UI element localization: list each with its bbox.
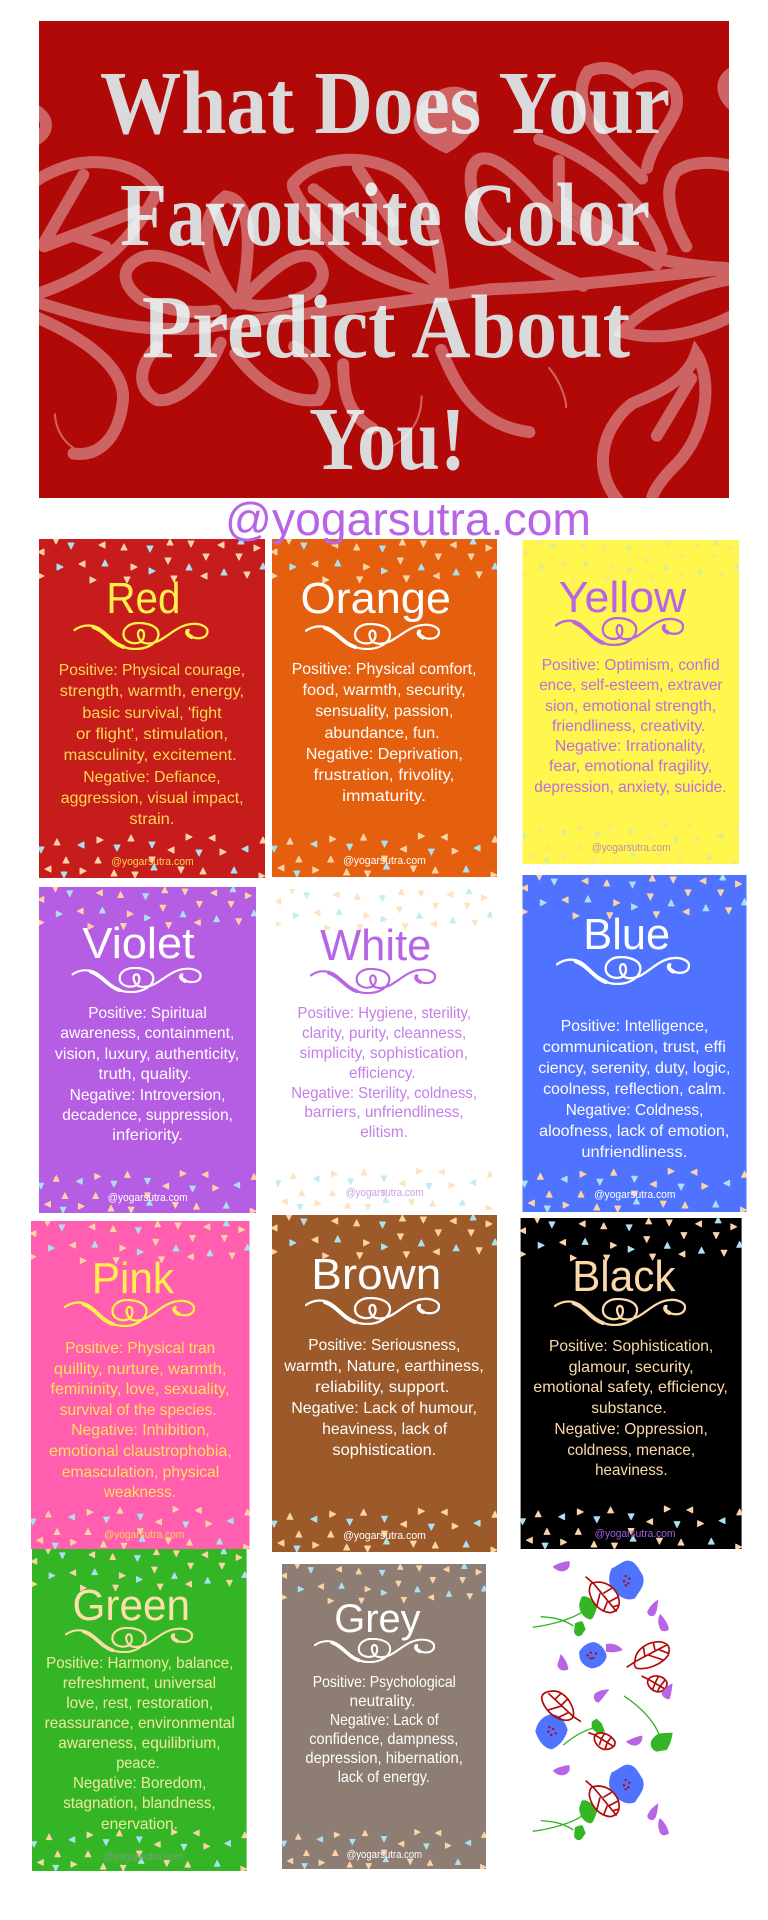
blue card text: coolness, reflection, calm. <box>543 1081 726 1098</box>
green card text: awareness, equilibrium, <box>58 1735 221 1752</box>
grey card text <box>305 1674 463 1786</box>
red card text: aggression, visual impact, <box>61 790 244 807</box>
black card text <box>533 1338 728 1479</box>
orange card text: abundance, fun. <box>324 725 440 742</box>
orange card text: food, warmth, security, <box>302 682 466 699</box>
orange card text: Positive: Physical comfort, <box>292 661 476 678</box>
blue card flourish <box>557 957 689 984</box>
green card text: Negative: Boredom, <box>73 1775 206 1792</box>
blue card text: aloofness, lack of emotion, <box>539 1123 729 1140</box>
blue card heading: Blue <box>583 910 670 959</box>
title <box>100 54 670 489</box>
violet card text: truth, quality. <box>98 1066 192 1083</box>
brown card text: Negative: Lack of humour, <box>291 1400 477 1417</box>
green card text: Positive: Harmony, balance, <box>46 1655 233 1672</box>
yellow card text: fear, emotional fragility, <box>549 758 712 775</box>
green card text: enervation. <box>101 1816 178 1833</box>
orange card watermark: @yogarsutra.com <box>343 855 426 867</box>
brown card heading: Brown <box>311 1250 441 1299</box>
brown card text: warmth, Nature, earthiness, <box>283 1358 484 1375</box>
blue card <box>522 874 747 1213</box>
grey card text: lack of energy. <box>338 1769 430 1786</box>
black card text: heaviness. <box>595 1462 668 1479</box>
green card text: love, rest, restoration, <box>66 1695 213 1712</box>
grey card text: Positive: Psychological <box>313 1674 456 1691</box>
title: Predict About <box>142 278 630 377</box>
green card watermark: @yogarsutra.com <box>104 1851 183 1863</box>
orange card flourish <box>306 624 439 649</box>
white card text: elitism. <box>360 1124 408 1141</box>
red card text: strain. <box>129 811 174 828</box>
green card text: peace. <box>116 1755 160 1772</box>
title: Favourite Color <box>120 166 650 265</box>
brown card text <box>283 1337 484 1459</box>
red card flourish <box>74 623 208 649</box>
black card text: glamour, security, <box>569 1359 694 1376</box>
green card heading: Green <box>72 1581 190 1630</box>
white card text: Negative: Sterility, coldness, <box>291 1085 477 1102</box>
blue card text: ciency, serenity, duty, logic, <box>538 1060 730 1077</box>
grey card text: Negative: Lack of <box>330 1712 439 1729</box>
grey card text: neutrality. <box>350 1693 415 1710</box>
violet card text: Negative: Introversion, <box>70 1087 225 1104</box>
grey card text: confidence, dampness, <box>309 1731 458 1748</box>
brown card text: sophistication. <box>332 1442 436 1459</box>
pink card watermark: @yogarsutra.com <box>104 1529 184 1541</box>
green card <box>31 1548 248 1872</box>
red card <box>38 538 266 879</box>
violet card text: Positive: Spiritual <box>88 1005 207 1022</box>
grey card watermark: @yogarsutra.com <box>347 1849 422 1861</box>
violet card text: decadence, suppression, <box>62 1107 233 1124</box>
violet card text: inferiority. <box>112 1127 183 1144</box>
red card text: masculinity, excitement. <box>64 747 237 764</box>
black card text: coldness, menace, <box>567 1442 695 1459</box>
white card text <box>291 1005 477 1141</box>
brown card watermark: @yogarsutra.com <box>343 1530 426 1542</box>
red card watermark: @yogarsutra.com <box>111 856 194 868</box>
brown card text: Positive: Seriousness, <box>308 1337 460 1354</box>
orange card text: sensuality, passion, <box>315 703 453 720</box>
blue card text <box>538 1018 730 1161</box>
yellow card text: depression, anxiety, suicide. <box>534 779 726 796</box>
green card text: reassurance, environmental <box>45 1715 235 1732</box>
red card text: strength, warmth, energy, <box>60 683 244 700</box>
green card text <box>45 1655 235 1833</box>
black card flourish <box>555 1299 685 1325</box>
green card text: refreshment, universal <box>63 1675 216 1692</box>
white card watermark: @yogarsutra.com <box>346 1187 424 1199</box>
black card <box>520 1217 743 1550</box>
brown card text: reliability, support. <box>315 1379 450 1396</box>
black card text: substance. <box>591 1400 667 1417</box>
pink card text: weakness. <box>103 1484 176 1501</box>
orange card heading: Orange <box>300 574 451 623</box>
black card heading: Black <box>572 1252 676 1301</box>
violet card text: awareness, containment, <box>60 1025 234 1042</box>
white card text: simplicity, sophistication, <box>300 1045 468 1062</box>
white card <box>272 887 497 1213</box>
yellow card text: Negative: Irrationality, <box>555 738 706 755</box>
pink card text: Negative: Inhibition, <box>71 1422 210 1439</box>
violet card flourish <box>72 968 201 992</box>
red card text <box>59 662 245 828</box>
red card text: or flight', stimulation, <box>76 726 228 743</box>
yellow card flourish <box>556 618 683 645</box>
orange card text: Negative: Deprivation, <box>306 746 463 763</box>
pink card text: emasculation, physical <box>62 1464 219 1481</box>
brown card <box>271 1214 498 1553</box>
yellow card <box>522 539 740 865</box>
title: You! <box>309 390 466 489</box>
green card flourish <box>66 1628 192 1652</box>
grey card heading: Grey <box>334 1597 421 1641</box>
white card text: barriers, unfriendliness, <box>304 1104 464 1121</box>
blue card text: unfriendliness. <box>581 1144 687 1161</box>
yellow card text: ence, self-esteem, extraver <box>539 677 723 694</box>
violet card text: vision, luxury, authenticity, <box>55 1046 239 1063</box>
red card text: Positive: Physical courage, <box>59 662 245 679</box>
website address: @yogarsutra.com <box>225 493 591 545</box>
black card text: emotional safety, efficiency, <box>533 1379 728 1396</box>
pink card text <box>49 1340 232 1501</box>
violet card heading: Violet <box>82 919 195 968</box>
blue card text: Positive: Intelligence, <box>561 1018 708 1035</box>
orange card text: immaturity. <box>342 788 426 805</box>
yellow card heading: Yellow <box>559 573 687 622</box>
pink card text: femininity, love, sexuality, <box>50 1381 229 1398</box>
title: What Does Your <box>100 54 670 153</box>
floral brush pattern <box>29 68 735 500</box>
pink card text: Positive: Physical tran <box>65 1340 215 1357</box>
yellow card text: sion, emotional strength, <box>545 698 716 715</box>
blue card watermark: @yogarsutra.com <box>594 1189 676 1201</box>
black card text: Positive: Sophistication, <box>549 1338 713 1355</box>
white card heading: White <box>320 921 431 970</box>
yellow card text: friendliness, creativity. <box>552 718 705 735</box>
violet card text <box>55 1005 239 1144</box>
white card text: clarity, purity, cleanness, <box>302 1025 466 1042</box>
black card text: Negative: Oppression, <box>554 1421 708 1438</box>
red card text: Negative: Defiance, <box>83 769 221 786</box>
violet card watermark: @yogarsutra.com <box>108 1192 188 1204</box>
flower and leaf illustration <box>533 1561 673 1840</box>
orange card text: frustration, frivolity, <box>314 767 454 784</box>
grey card flourish <box>315 1639 434 1662</box>
pink card text: quillity, nurture, warmth, <box>54 1361 226 1378</box>
grey card text: depression, hibernation, <box>305 1750 463 1767</box>
blue card text: communication, trust, effi <box>543 1039 726 1056</box>
pink card <box>30 1220 250 1550</box>
black card watermark: @yogarsutra.com <box>595 1528 676 1540</box>
red card text: basic survival, 'fight <box>82 705 222 722</box>
white card flourish <box>311 969 435 993</box>
orange card <box>271 538 498 878</box>
yellow card watermark: @yogarsutra.com <box>592 842 671 854</box>
brown card flourish <box>306 1298 439 1324</box>
violet card <box>38 886 257 1214</box>
hero banner <box>29 21 735 500</box>
pink card text: emotional claustrophobia, <box>49 1443 232 1460</box>
pink card heading: Pink <box>92 1254 175 1303</box>
red card heading: Red <box>106 574 180 623</box>
white card text: efficiency. <box>349 1065 416 1082</box>
yellow card text <box>534 657 726 796</box>
orange card text <box>292 661 476 805</box>
yellow card text: Positive: Optimism, confid <box>542 657 720 674</box>
green card text: stagnation, blandness, <box>63 1795 216 1812</box>
pink card flourish <box>65 1300 194 1326</box>
brown card text: heaviness, lack of <box>322 1421 448 1438</box>
grey card <box>281 1563 487 1870</box>
white card text: Positive: Hygiene, sterility, <box>298 1005 471 1022</box>
blue card text: Negative: Coldness, <box>566 1102 703 1119</box>
pink card text: survival of the species. <box>60 1402 217 1419</box>
